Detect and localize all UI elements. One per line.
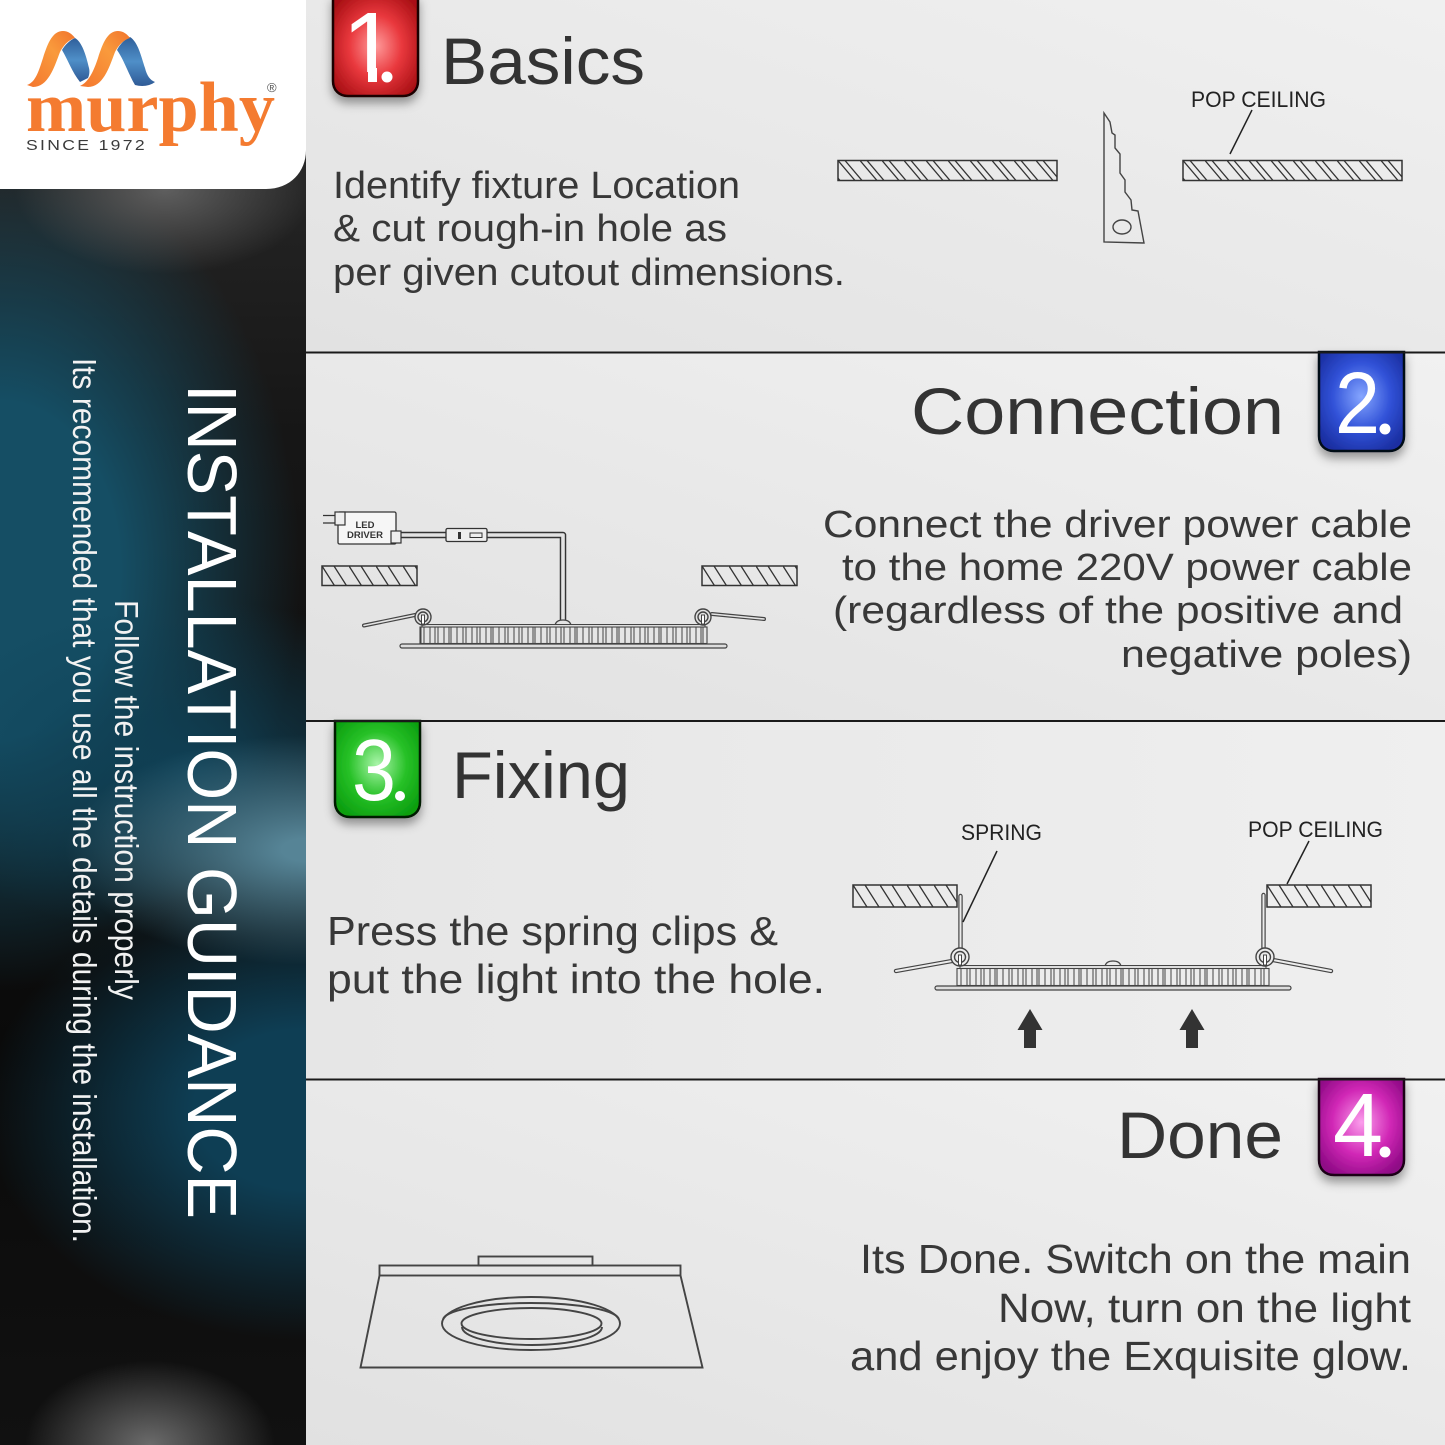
panel: basics background [306, 0, 1445, 352]
connector [446, 528, 487, 542]
text block: basics: & cut rough-in hole as [333, 208, 727, 250]
led panel [935, 961, 1291, 990]
logo wordmark: murphy [26, 69, 275, 147]
badge: step 4: 4 [1333, 1076, 1383, 1176]
heading: done: Done [1117, 1098, 1283, 1172]
logo tagline: SINCE 1972 [26, 137, 147, 154]
text block: done [850, 1236, 1412, 1379]
diagram: installed fixture [360, 1256, 702, 1368]
text block: connection: (regardless of the positive and [833, 590, 1403, 632]
badge: step 1: . [383, 53, 391, 86]
text block: basics: per given cutout dimensions. [333, 252, 845, 294]
ceiling section left [838, 160, 1057, 180]
text block: basics [333, 165, 845, 294]
label: pop ceiling: POP CEILING [1191, 87, 1326, 112]
ceiling section right [1183, 160, 1402, 180]
diagram: spring fixing [853, 817, 1383, 1048]
ceiling section right [702, 566, 797, 586]
text block: connection [823, 504, 1412, 676]
side panel text: recommendation: Its recommended that you use all the details during the installation. [66, 358, 103, 1243]
wires [323, 516, 563, 622]
text block: done: Its Done. Switch on the main [860, 1236, 1411, 1282]
text block: fixing: put the light into the hole. [327, 956, 825, 1002]
panel: connection background [306, 352, 1445, 721]
heading: basics: Basics [441, 24, 645, 98]
led driver box: DRIVER [347, 530, 383, 541]
panel: fixing background [306, 721, 1445, 1079]
ceiling section right [1267, 885, 1371, 907]
text block: done: and enjoy the Exquisite glow. [850, 1333, 1411, 1379]
registered mark: ® [267, 80, 277, 95]
ceiling section left [853, 885, 957, 907]
text block: fixing [327, 908, 825, 1002]
led panel [400, 620, 727, 648]
icon: saw [1104, 113, 1144, 243]
label: pop ceiling [1191, 87, 1326, 154]
diagram: driver wiring [322, 512, 797, 648]
ceiling section left [322, 566, 417, 586]
badge: step 2: . [1381, 405, 1389, 438]
arrow: right up [1180, 1009, 1204, 1048]
icon: murphy ribbon mark [27, 31, 155, 87]
divider lines [306, 352, 1445, 1080]
text block: fixing: Press the spring clips & [327, 908, 778, 954]
text block: connection: negative poles) [1121, 634, 1412, 676]
label: spring [961, 820, 1042, 922]
badge: step 2: 2 [1335, 355, 1380, 452]
diagram: ceiling cutout [838, 87, 1402, 243]
badge: step 4: . [1381, 1128, 1389, 1161]
text block: basics: Identify fixture Location [333, 165, 740, 207]
led driver box [335, 512, 401, 544]
badge: step 1 [333, 0, 418, 104]
badge: step 3 [335, 721, 420, 819]
side panel background [0, 150, 306, 1445]
heading: connection: Connection [911, 374, 1284, 448]
spring clips [364, 609, 764, 626]
arrow: left up [1018, 1009, 1042, 1048]
badge: step 3: 3 [352, 722, 396, 819]
label: spring: SPRING [961, 820, 1042, 845]
text block: done: Now, turn on the light [998, 1285, 1412, 1331]
heading: fixing: Fixing [452, 738, 630, 812]
side panel text: follow instructions: Follow the instruction properly [108, 600, 145, 1000]
logo panel [0, 0, 306, 189]
spring pivots [951, 948, 1274, 966]
spring arms [896, 895, 1331, 971]
text block: connection: to the home 220V power cable [842, 547, 1412, 589]
badge: step 3: . [396, 772, 404, 805]
badge: step 2 [1319, 352, 1404, 452]
side panel heading: INSTALLATION GUIDANCE [173, 384, 251, 1219]
panel: done background [306, 1079, 1445, 1445]
text block: connection: Connect the driver power cable [823, 504, 1412, 546]
label: pop ceiling: POP CEILING [1248, 817, 1383, 842]
badge: step 4 [1319, 1076, 1404, 1176]
led driver box: LED [356, 520, 375, 531]
label: pop ceiling [1248, 817, 1383, 884]
